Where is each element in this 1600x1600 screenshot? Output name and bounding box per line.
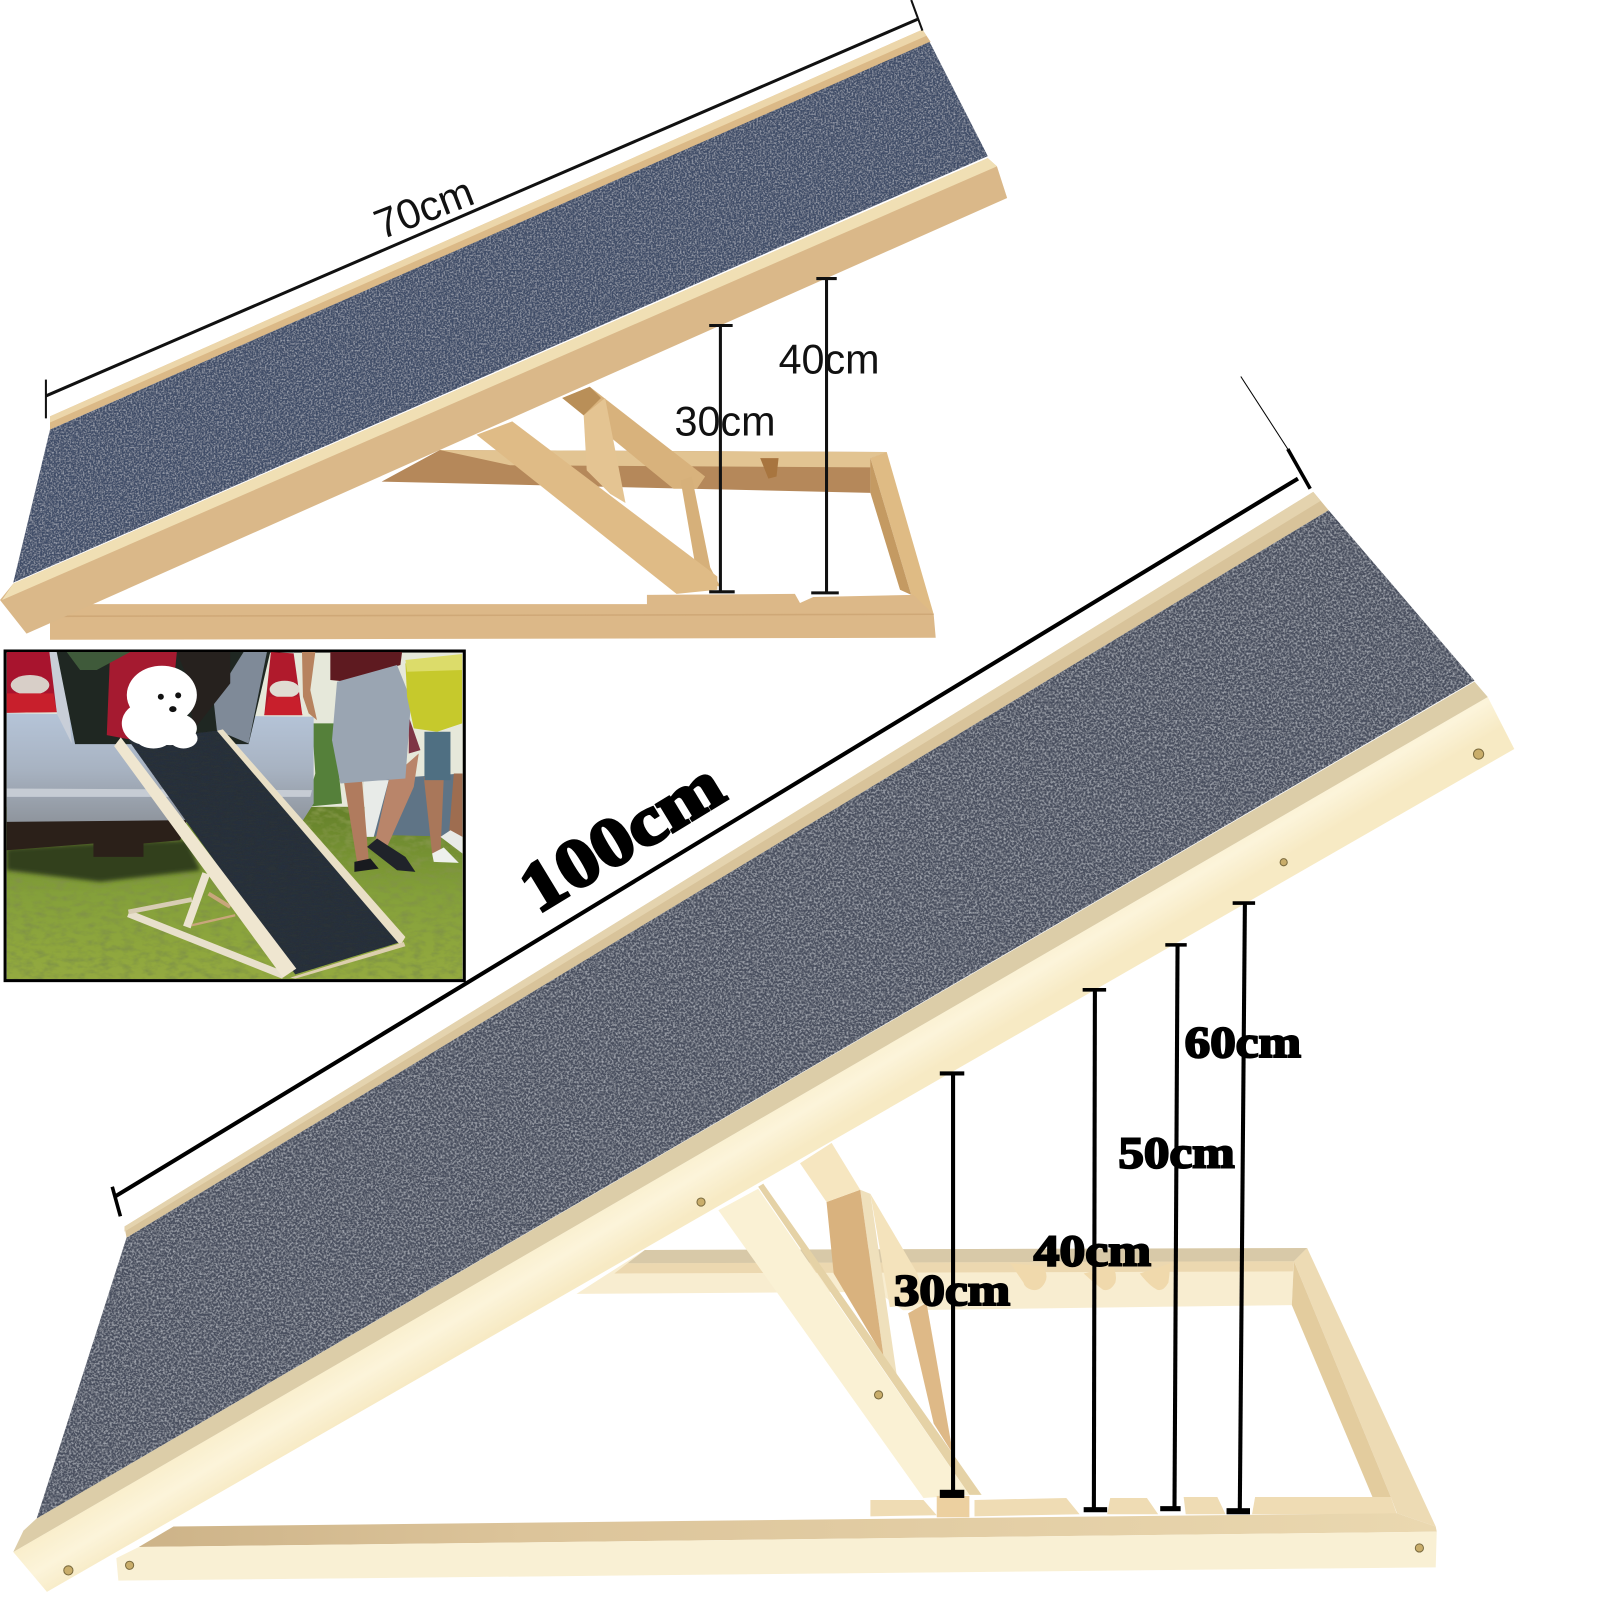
dimension bar: 30cm — [940, 1073, 964, 1498]
ramp base frame — [50, 450, 936, 640]
panel: photo of dog on ramp at car — [5, 651, 464, 981]
label: 70cm: 70cm — [368, 168, 480, 248]
ramp carpet — [37, 510, 1474, 1518]
label: 100cm: 100cm — [506, 746, 737, 928]
ramp top rail — [50, 30, 931, 430]
base frame step blocks — [870, 1497, 1397, 1516]
car shadow — [7, 840, 200, 882]
ramp frame on grass — [128, 874, 284, 975]
plaid shirt — [330, 652, 402, 682]
label: 30cm: 30cm — [674, 399, 776, 445]
right tail light — [264, 652, 302, 715]
base frame right rail — [1292, 1248, 1436, 1527]
ramp top rail — [124, 492, 1329, 1238]
bumper crease — [7, 788, 312, 797]
photo scene — [7, 652, 462, 980]
ramp side rail — [0, 158, 1007, 634]
label: 30cm: 30cm — [894, 1265, 1010, 1315]
label: 40cm: 40cm — [779, 336, 880, 382]
car bumper — [7, 713, 314, 824]
left tail light — [7, 652, 57, 713]
tent behind people — [364, 773, 462, 837]
base frame back bar — [577, 1248, 1307, 1310]
dimension bar: 60cm — [1227, 903, 1255, 1514]
ramp carpet — [13, 42, 988, 583]
camping gear — [107, 652, 177, 740]
dimension bar: 40cm height — [811, 279, 839, 593]
person legs — [344, 717, 462, 862]
label: 50cm: 50cm — [1118, 1127, 1235, 1177]
panel: large 100cm ramp — [13, 377, 1514, 1592]
ramp folding supports — [477, 387, 720, 594]
dimension line: 70cm length — [46, 0, 922, 418]
dimension bar: 40cm — [1083, 990, 1107, 1512]
shoes — [354, 830, 462, 872]
shrubs behind people — [312, 723, 342, 806]
screws — [64, 749, 1484, 1575]
panel: small 70cm ramp — [0, 0, 1007, 640]
grass — [7, 807, 462, 980]
label: 40cm: 40cm — [1034, 1225, 1151, 1275]
base frame front bar — [116, 1513, 1437, 1581]
ramp side rail — [13, 697, 1514, 1592]
ramp carpet in photo — [128, 731, 400, 974]
grey skirt — [332, 665, 411, 783]
ramp right rail in photo — [217, 729, 405, 945]
dimension bar: 50cm — [1160, 945, 1187, 1511]
arm — [302, 652, 317, 720]
dimension line: 100cm length — [112, 377, 1310, 1216]
car rear pillars — [49, 652, 72, 743]
photo border — [5, 651, 464, 981]
car underside — [7, 820, 187, 857]
yellow cooler — [405, 654, 462, 732]
dimension bar: 30cm height — [709, 326, 735, 592]
dog — [122, 666, 198, 748]
trunk opening — [57, 652, 270, 744]
folding supports — [718, 1143, 982, 1517]
ramp left rail in photo — [114, 737, 296, 978]
label: 60cm: 60cm — [1185, 1017, 1301, 1067]
